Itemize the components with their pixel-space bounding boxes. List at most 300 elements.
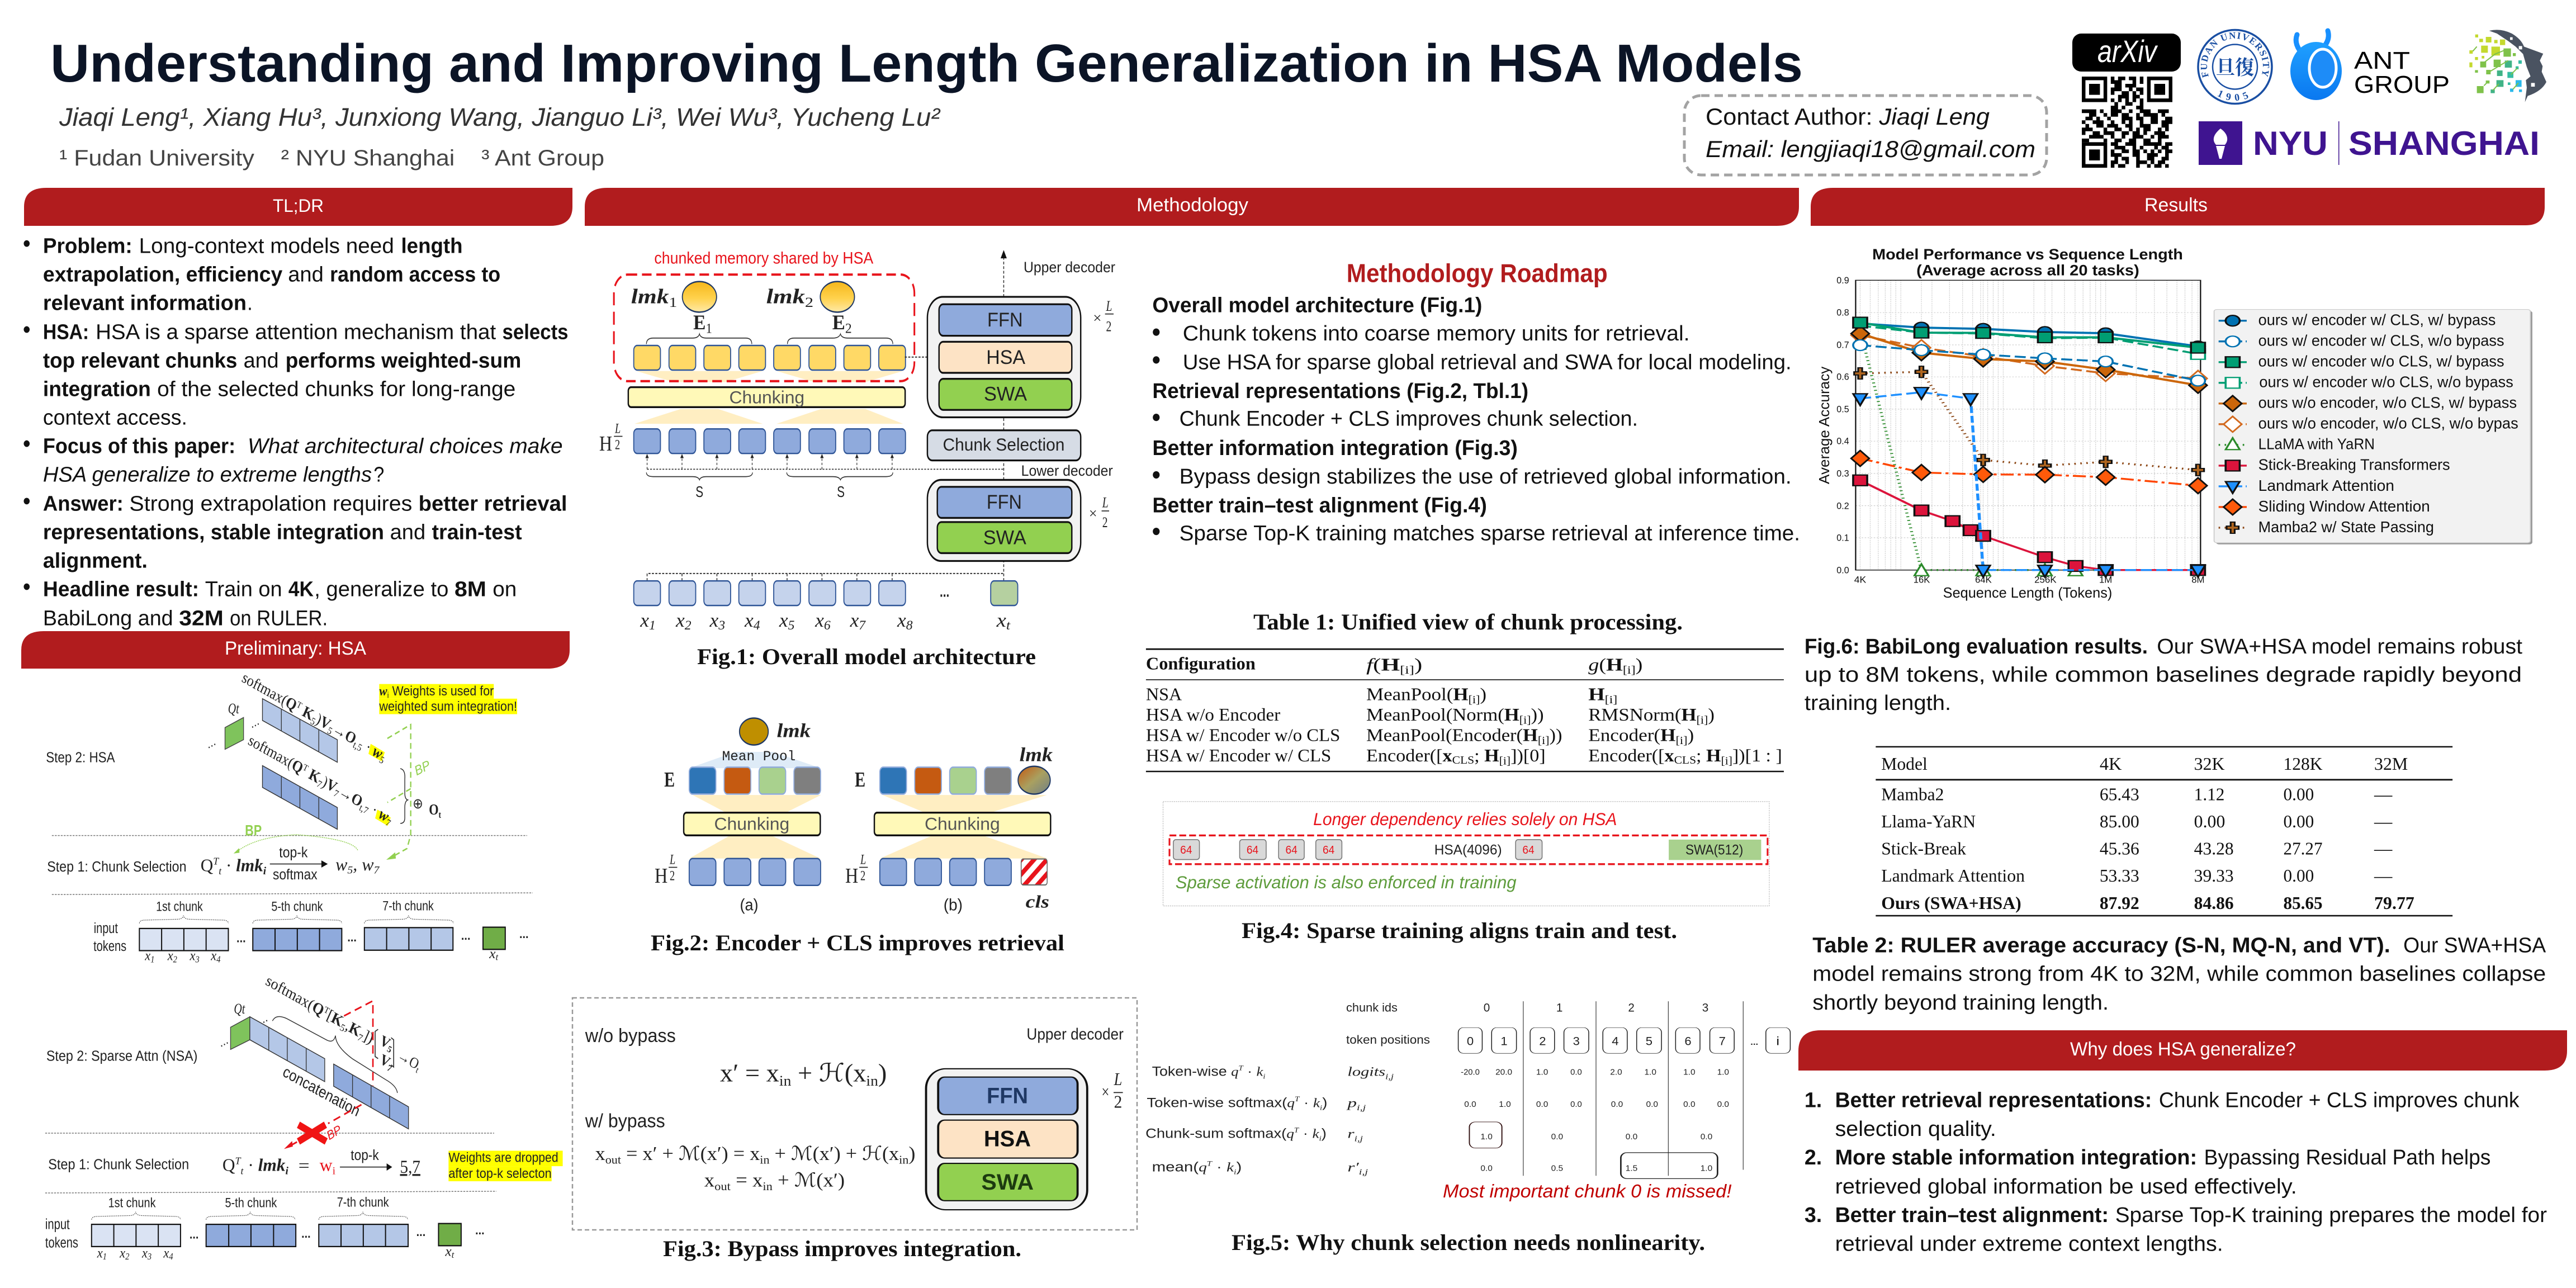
label: lower step 1: Step 1: Chunk Selection [48, 1157, 189, 1173]
section header: Results [1811, 188, 2545, 226]
row: chunk-sum softmax: 0.0 [1626, 1132, 1637, 1141]
row: Mamba2: 0.00 [2284, 784, 2314, 804]
row: Mamba2: 65.43 [2100, 784, 2139, 804]
text block: TL;DR bullets: better retrieval [419, 491, 567, 515]
formula: no bypass: ℋ(x [819, 1058, 883, 1087]
row: HSA without encoder: [i] [1519, 714, 1531, 727]
formula: bypass expanded: = x′ + [621, 1143, 679, 1164]
callout: weights dropped: after top-k selecton [448, 1166, 552, 1181]
figure 4: sparse training [1163, 802, 1769, 906]
figure: HSA preliminary diagram: ... [519, 927, 529, 941]
dashed sequence bar [1169, 835, 1768, 864]
upper decoder block: HSA [986, 347, 1026, 368]
rotated formula: chunk 7 output: → [337, 782, 356, 805]
icon: Ant Group logo: ANT [2354, 47, 2410, 74]
row: token-wise softmax: i [1320, 1104, 1322, 1111]
rotated formula: chunk 7 output: V [324, 775, 340, 796]
section header: Preliminary: HSA: Preliminary: HSA [225, 638, 366, 659]
upper decoder block: SWA [984, 383, 1027, 405]
figure: HSA preliminary diagram: t [439, 810, 442, 820]
x axis ticks: 1M [2099, 575, 2112, 585]
caption: Table 1: Table 1: Unified view of chunk processing. [1253, 609, 1683, 634]
decoder block: HSA [984, 1126, 1031, 1151]
item 2 [1805, 1145, 2490, 1198]
active chunks: 64 [1247, 844, 1258, 856]
figure: HSA preliminary diagram: ... [347, 931, 357, 944]
label: upper decoder: Upper decoder [1026, 1025, 1124, 1043]
rotated formula: chunk 7 output: K [306, 765, 323, 787]
row: logits: 20.0 [1495, 1067, 1512, 1077]
header row: [i] [1623, 664, 1636, 676]
label: BP bold green: BP [245, 822, 262, 839]
landmark 2 [766, 282, 855, 336]
rotated formula: chunk 7 output: T [301, 763, 310, 774]
text block: TL;DR bullets: extrapolation, efficiency [43, 262, 282, 286]
text block: TL;DR bullets: HSA generalize to extreme lengths [43, 462, 372, 486]
row: HSA with encoder with CLS: Encoder([ x [1588, 746, 1673, 765]
y axis ticks: 0.3 [1836, 468, 1849, 479]
lower token subscripts: x [445, 1244, 451, 1259]
row: HSA with encoder with CLS: H [1484, 746, 1499, 765]
row: Ours: 79.77 [2374, 893, 2414, 913]
row: HSA with encoder without CLS [1146, 725, 1694, 747]
row: NSA: [i] [1605, 694, 1617, 706]
text block: TL;DR bullets: alignment. [43, 548, 148, 572]
row: token-wise softmax: T [1295, 1095, 1300, 1103]
chunk 5 parallelogram [262, 699, 337, 763]
rotated formula: concatenated softmax: 5 [338, 1021, 347, 1034]
x axis ticks: 256K [2034, 575, 2057, 585]
label: softmax: softmax [273, 867, 318, 883]
item 1 [1805, 1088, 2520, 1140]
label: H L/2: L [614, 421, 621, 436]
SWA segment: SWA(512) [1685, 842, 1743, 858]
row: token-wise softmax [1147, 1095, 1729, 1112]
row: Landmark Attention: — [2374, 866, 2393, 886]
text block: TL;DR bullets: HSA: [43, 320, 89, 344]
red dropped gradient path [287, 1001, 373, 1147]
contact box: Email: lengjiaqi18@gmail.com [1706, 136, 2035, 162]
label: Qt: Qt [228, 701, 240, 717]
rotated label: concatenation: concatenation [280, 1063, 363, 1120]
active chunks: 64 [1323, 844, 1334, 856]
row: token-wise softmax: 0.0 [1570, 1100, 1582, 1109]
formula: lower chunk selection: · [244, 1156, 258, 1175]
formula: bypass short: ℳ(x′) [794, 1169, 865, 1191]
row: chunk-sum softmax: ) [1322, 1126, 1327, 1141]
row: chunk-sum softmax: r [1347, 1126, 1358, 1141]
header row: Model [1881, 754, 1928, 774]
lower chunk labels: 1st chunk [108, 1195, 156, 1210]
y axis ticks: 0.8 [1836, 307, 1849, 318]
header row [1146, 654, 1642, 676]
rotated formula: chunk 5 output: 5 [309, 715, 317, 727]
y axis ticks: 0.0 [1836, 565, 1849, 575]
label: E: E [664, 768, 675, 792]
row: chunk ids: 2 [1628, 1001, 1635, 1014]
row: logits: · [1243, 1064, 1256, 1079]
lower token subscripts: x [142, 1246, 148, 1261]
lower chunk labels: 7-th chunk [337, 1195, 389, 1210]
row: Stick-Break: 27.27 [2284, 839, 2323, 859]
input token row [139, 927, 505, 951]
row: token positions: 6 [1684, 1035, 1692, 1048]
row: mean: 1.0 [1701, 1163, 1712, 1173]
figure: HSA preliminary diagram: ... [204, 735, 217, 751]
row: token positions: 5 [1646, 1035, 1652, 1048]
row: Llama-YaRN: — [2374, 812, 2393, 831]
item 3: retrieval under extreme context lengths. [1835, 1232, 2223, 1256]
caption: Fig.6: Fig.6: BabiLong evaluation results. [1805, 634, 2148, 658]
landmark 2: E [832, 311, 842, 334]
y axis ticks [1836, 275, 1849, 575]
multiplier lower: × [1089, 505, 1097, 522]
formula: chunk selection: i [263, 865, 267, 877]
chunk selection box [927, 430, 1081, 461]
label: top-k: top-k [279, 845, 308, 861]
row: logits: k [1256, 1064, 1263, 1079]
rotated formula: chunk 5 output: O [343, 726, 359, 747]
matrix of values: V [377, 1050, 393, 1071]
active chunks: 64 [1180, 844, 1192, 856]
rotated formula: concatenated softmax: T [323, 1005, 331, 1016]
equals sign: = [299, 1155, 310, 1176]
section header: TL;DR [24, 188, 572, 226]
series: ours without encoder without bypass [1851, 327, 2207, 386]
label: lower input tokens: input [45, 1216, 70, 1233]
chart legend: LLaMA with YaRN [2258, 435, 2375, 453]
row: Landmark Attention: 53.33 [2100, 866, 2139, 886]
formula: bypass expanded: + [770, 1143, 791, 1164]
label: Step 2 sparse attention: Step 2: Sparse Attn (NSA) [46, 1048, 197, 1064]
row: token-wise softmax: 0.0 [1683, 1100, 1696, 1109]
y axis ticks: 0.7 [1836, 340, 1849, 350]
text block: TL;DR bullets: and [244, 348, 279, 372]
figure 5: chunk selection table: 3 [1702, 1001, 1708, 1014]
row: token-wise softmax: ) [1322, 1095, 1327, 1110]
arrow: lower top-k [340, 1164, 391, 1170]
token subscripts: 2 [173, 955, 177, 965]
multiplier lower: 2 [1102, 514, 1108, 531]
formula: no bypass: ) [878, 1059, 887, 1087]
token labels: x [897, 610, 903, 631]
header row: 128K [2284, 754, 2323, 774]
lower token subscripts: x [163, 1246, 169, 1261]
token subscripts [144, 946, 499, 965]
section header: TL;DR: TL;DR [273, 196, 324, 216]
row: logits: i [1263, 1072, 1265, 1081]
row: Stick-Break: 45.36 [2100, 839, 2139, 859]
multiplier upper: L [1106, 298, 1112, 315]
lower green query block [230, 1017, 250, 1049]
active chunks [1173, 840, 1542, 860]
chart title [1872, 247, 2183, 278]
matrix of values: 5 [386, 1044, 394, 1055]
row: Stick-Break [1881, 839, 2393, 859]
y axis ticks: 0.6 [1836, 372, 1849, 382]
input token boxes [634, 581, 1018, 605]
formula: no bypass: + [791, 1059, 819, 1087]
panel: methodology roadmap [1152, 259, 1800, 545]
row: Llama-YaRN: 0.00 [2284, 812, 2314, 831]
panel: methodology roadmap: Retrieval representations (Fig.2, Tbl.1) [1152, 379, 1528, 402]
text block: TL;DR bullets: train-test [432, 520, 522, 544]
formula: chunk selection: t [219, 865, 222, 877]
matrix of values [377, 1032, 396, 1074]
row: mean: 1.5 [1626, 1163, 1637, 1173]
header row: 32M [2374, 754, 2408, 774]
lower decoder block: SWA [983, 527, 1027, 549]
row: Stick-Break: 43.28 [2194, 839, 2234, 859]
row: NSA: [i] [1469, 694, 1480, 706]
selected weights: 5 [347, 864, 353, 876]
row: HSA with encoder without CLS: ) [1688, 725, 1694, 745]
figure: HSA preliminary diagram: ... [475, 1224, 485, 1237]
row: mean [1152, 1153, 1717, 1178]
landmark 1: 1 [705, 321, 712, 336]
y axis ticks: 0.4 [1836, 436, 1849, 446]
rotated formula: chunk 5 output: K [300, 702, 316, 724]
lower chunk labels: 5-th chunk [225, 1195, 277, 1210]
panel: methodology roadmap: Use HSA for sparse global retrieval and SWA for local modeling. [1183, 350, 1792, 374]
token subscripts: 4 [216, 955, 221, 965]
row: token-wise softmax: 1.0 [1499, 1100, 1511, 1109]
callout: weights used [378, 684, 517, 714]
panel: methodology roadmap: Overall model architecture (Fig.1) [1152, 293, 1482, 317]
section header: Preliminary: HSA [21, 631, 570, 669]
row: mean: T [1207, 1159, 1213, 1167]
token labels: x [850, 610, 856, 631]
token labels: 1 [649, 619, 656, 633]
CLS token: cls [1026, 892, 1049, 911]
red weights: i [333, 1164, 335, 1177]
rotated formula: chunk 7 output: 7 [384, 817, 392, 829]
row: token positions: 0 [1467, 1035, 1474, 1048]
token subscripts: 3 [195, 955, 200, 965]
formula: lower chunk selection: lmk [258, 1156, 286, 1175]
x axis ticks [1854, 575, 2205, 585]
x axis ticks: 4K [1854, 575, 1867, 585]
label: mean pool: Mean Pool [722, 749, 795, 765]
formula: lower chunk selection: Q [222, 1156, 234, 1175]
section header: Why does HSA generalize? [1798, 1030, 2567, 1071]
row: Ours: 87.92 [2100, 893, 2139, 913]
caption: Fig.5: Fig.5: Why chunk selection needs nonlinearity. [1232, 1230, 1705, 1255]
text block: TL;DR bullets [23, 234, 569, 630]
text block: TL;DR bullets: Answer: [43, 491, 124, 515]
row: token-wise softmax: k [1313, 1095, 1320, 1110]
row: chunk ids [1346, 1001, 1708, 1014]
header row: 32K [2194, 754, 2224, 774]
row: logits [1152, 1064, 1729, 1081]
row: token positions: ... [1750, 1038, 1758, 1046]
row: token positions: 7 [1719, 1035, 1726, 1048]
token labels: 3 [718, 619, 725, 633]
formula: lower chunk selection: i [285, 1164, 289, 1177]
label: input tokens: input [94, 921, 118, 936]
item 1: Better retrieval representations: [1835, 1088, 2152, 1112]
series: ours without encoder with bypass [1851, 326, 2207, 393]
labels: H L/2: 2 [860, 868, 865, 883]
figure 2: encoder and CLS [655, 718, 1053, 914]
row: HSA with encoder without CLS: [i] [1676, 735, 1688, 747]
panel: methodology roadmap: Chunk Encoder + CLS improves chunk selection. [1180, 406, 1638, 430]
series: ours without CLS without bypass [1860, 326, 2205, 359]
header row: [i] [1400, 664, 1414, 676]
output arrow: t [414, 1065, 420, 1076]
text block: TL;DR bullets: top relevant chunks [43, 348, 237, 372]
row: Llama-YaRN: Llama-YaRN [1881, 812, 1976, 831]
concatenated chunks [250, 1017, 409, 1129]
selected weights: , w [353, 855, 374, 874]
label: BP red: BP [325, 1123, 343, 1143]
multiplier: 2 [1114, 1092, 1122, 1112]
series: sliding window attention [1851, 451, 2207, 494]
active chunks: 64 [1522, 844, 1535, 856]
rotated formula: concatenated softmax: K [329, 1008, 346, 1030]
token subscripts: x [211, 949, 216, 964]
series: ours with CLS without bypass [1853, 340, 2205, 386]
decoder block: FFN [987, 1083, 1028, 1108]
caption: Fig.1: Fig.1: Overall model architecture [697, 644, 1036, 669]
formula: bypass short: out [714, 1180, 731, 1193]
landmark 2: 2 [845, 321, 852, 336]
text block: TL;DR bullets: selects [503, 320, 569, 344]
item 2: retrieved global information be used effectively. [1835, 1174, 2297, 1198]
rotated formula: chunk 5 output: → [330, 719, 349, 742]
text block: TL;DR bullets: HSA is a sparse attention mechanism that [96, 320, 496, 344]
heading: roadmap: Methodology Roadmap [1347, 259, 1608, 288]
text block: TL;DR bullets: Train on [205, 577, 282, 601]
rotated formula: chunk 7 output: 7 [332, 788, 340, 799]
callout: weights used: w [379, 684, 387, 698]
formula: no bypass: in [779, 1073, 791, 1089]
rotated formula: chunk 5 output: · [360, 736, 377, 758]
formula: no bypass: x′ = x [720, 1059, 824, 1087]
row: HSA with encoder with CLS: HSA w/ Encoder w/ CLS [1146, 746, 1331, 765]
text block: TL;DR bullets: context access. [43, 405, 187, 429]
panel: methodology roadmap: Better information integration (Fig.3) [1152, 436, 1518, 460]
row: mean: i [1234, 1168, 1237, 1176]
row: token-wise softmax: 0.0 [1611, 1100, 1623, 1109]
rotated formula: chunk 5 output: 5 [326, 724, 334, 737]
text block: TL;DR bullets: BabiLong and [43, 606, 173, 630]
arrow: memory to HSA [933, 354, 939, 360]
chunking bar (b): Chunking [925, 814, 1000, 834]
section header: Methodology [585, 188, 1799, 226]
labels: H L/2: 2 [670, 868, 675, 883]
figure: HSA preliminary diagram: ... [416, 1225, 425, 1239]
x axis title: Sequence Length (Tokens) [1943, 585, 2112, 601]
lower token subscripts: t [452, 1250, 454, 1260]
token labels: 7 [859, 619, 866, 633]
green query block [225, 717, 244, 749]
rotated formula: concatenated softmax: softmax(Q [263, 972, 326, 1019]
lower token subscripts: 3 [147, 1252, 151, 1262]
rotated formula: concatenated softmax: K [347, 1019, 363, 1040]
text block: TL;DR bullets: Strong extrapolation requires [129, 491, 412, 515]
header row: ) [1636, 655, 1642, 675]
label: lower top-k: top-k [351, 1148, 379, 1163]
formula: bypass expanded: x [595, 1143, 613, 1164]
rotated formula: concatenated softmax: ]) [361, 1026, 376, 1047]
lower decoder block: FFN [987, 491, 1022, 513]
label: HSA 4096: HSA(4096) [1434, 842, 1502, 858]
row: Mamba2: 1.12 [2194, 784, 2224, 804]
item 3: Better train–test alignment: [1835, 1203, 2109, 1227]
formula: bypass expanded: ℳ(x′) = x [679, 1142, 803, 1164]
row: token-wise softmax: 0.0 [1646, 1100, 1658, 1109]
row: token-wise softmax: p [1347, 1095, 1362, 1110]
token subscripts: x [190, 949, 196, 964]
numbered list: why HSA generalizes [1805, 1088, 2547, 1256]
label: input tokens: tokens [93, 939, 126, 955]
landmark 1: E [693, 311, 703, 334]
row: NSA [1146, 684, 1617, 706]
series: ours without CLS with bypass [1853, 318, 2205, 353]
formula: bypass short: x [704, 1169, 722, 1191]
token subscripts: x [489, 946, 495, 962]
item 2: More stable information integration: [1835, 1145, 2197, 1169]
figure: HSA preliminary diagram [45, 669, 563, 1262]
label: upper decoder: Upper decoder [1024, 259, 1115, 276]
token subscripts: x [145, 949, 150, 964]
landmark 1 [631, 282, 717, 336]
label: H L/2 [599, 421, 622, 456]
panel: methodology roadmap: Better train–test alignment (Fig.4) [1152, 493, 1487, 517]
chart legend: Mamba2 w/ State Passing [2258, 518, 2434, 536]
chunk selection box: Chunk Selection [943, 435, 1064, 454]
formula: bypass short: in [763, 1180, 773, 1193]
upper decoder block: FFN [987, 309, 1023, 331]
row: Landmark Attention: 39.33 [2194, 866, 2234, 886]
row: chunk-sum softmax: Chunk-sum softmax(q [1145, 1126, 1406, 1141]
text block: TL;DR bullets: on [493, 577, 517, 601]
landmark 2: lmk [766, 285, 789, 308]
lower decoder block [927, 480, 1081, 561]
row: HSA without encoder: [i] [1697, 714, 1708, 727]
callout: weights dropped: Weights are dropped [448, 1150, 558, 1165]
formula: lower chunk selection: t [241, 1165, 244, 1177]
row: token-wise softmax: Token-wise softmax(q [1147, 1095, 1404, 1110]
label: S [695, 484, 845, 501]
label: chunked memory: chunked memory shared by HSA [654, 248, 874, 267]
label: input tokens [93, 921, 126, 955]
icon: red X [299, 1125, 326, 1142]
figure: HSA preliminary diagram: ... [301, 1227, 311, 1240]
caption: Fig.6 [1805, 634, 2522, 714]
row: token positions: token positions [1346, 1034, 1430, 1046]
formula: bypass expanded: in [899, 1153, 908, 1166]
text block: TL;DR bullets: Focus of this paper: [43, 434, 235, 458]
row: Llama-YaRN: 85.00 [2100, 812, 2139, 831]
row: logits: T [1239, 1064, 1244, 1072]
formula: bypass expanded: out [605, 1153, 621, 1166]
row: mean: · [1212, 1159, 1227, 1175]
rotated formula: concatenated softmax: , [343, 1016, 353, 1034]
figure: HSA preliminary diagram: ... [248, 714, 261, 731]
label: S: S [695, 484, 703, 501]
row: Ours: Ours (SWA+HSA) [1881, 893, 2021, 913]
header row [1881, 754, 2408, 774]
text block: TL;DR bullets: length [401, 234, 463, 258]
formula: bypass expanded: in [760, 1153, 770, 1166]
row: HSA with encoder with CLS: [i] [1721, 755, 1732, 768]
row: Landmark Attention: Landmark Attention [1881, 866, 2025, 886]
row: chunk-sum softmax: i [1319, 1134, 1322, 1143]
label: with bypass: w/ bypass [585, 1111, 665, 1131]
row: HSA with encoder with CLS: ; [1474, 746, 1484, 765]
